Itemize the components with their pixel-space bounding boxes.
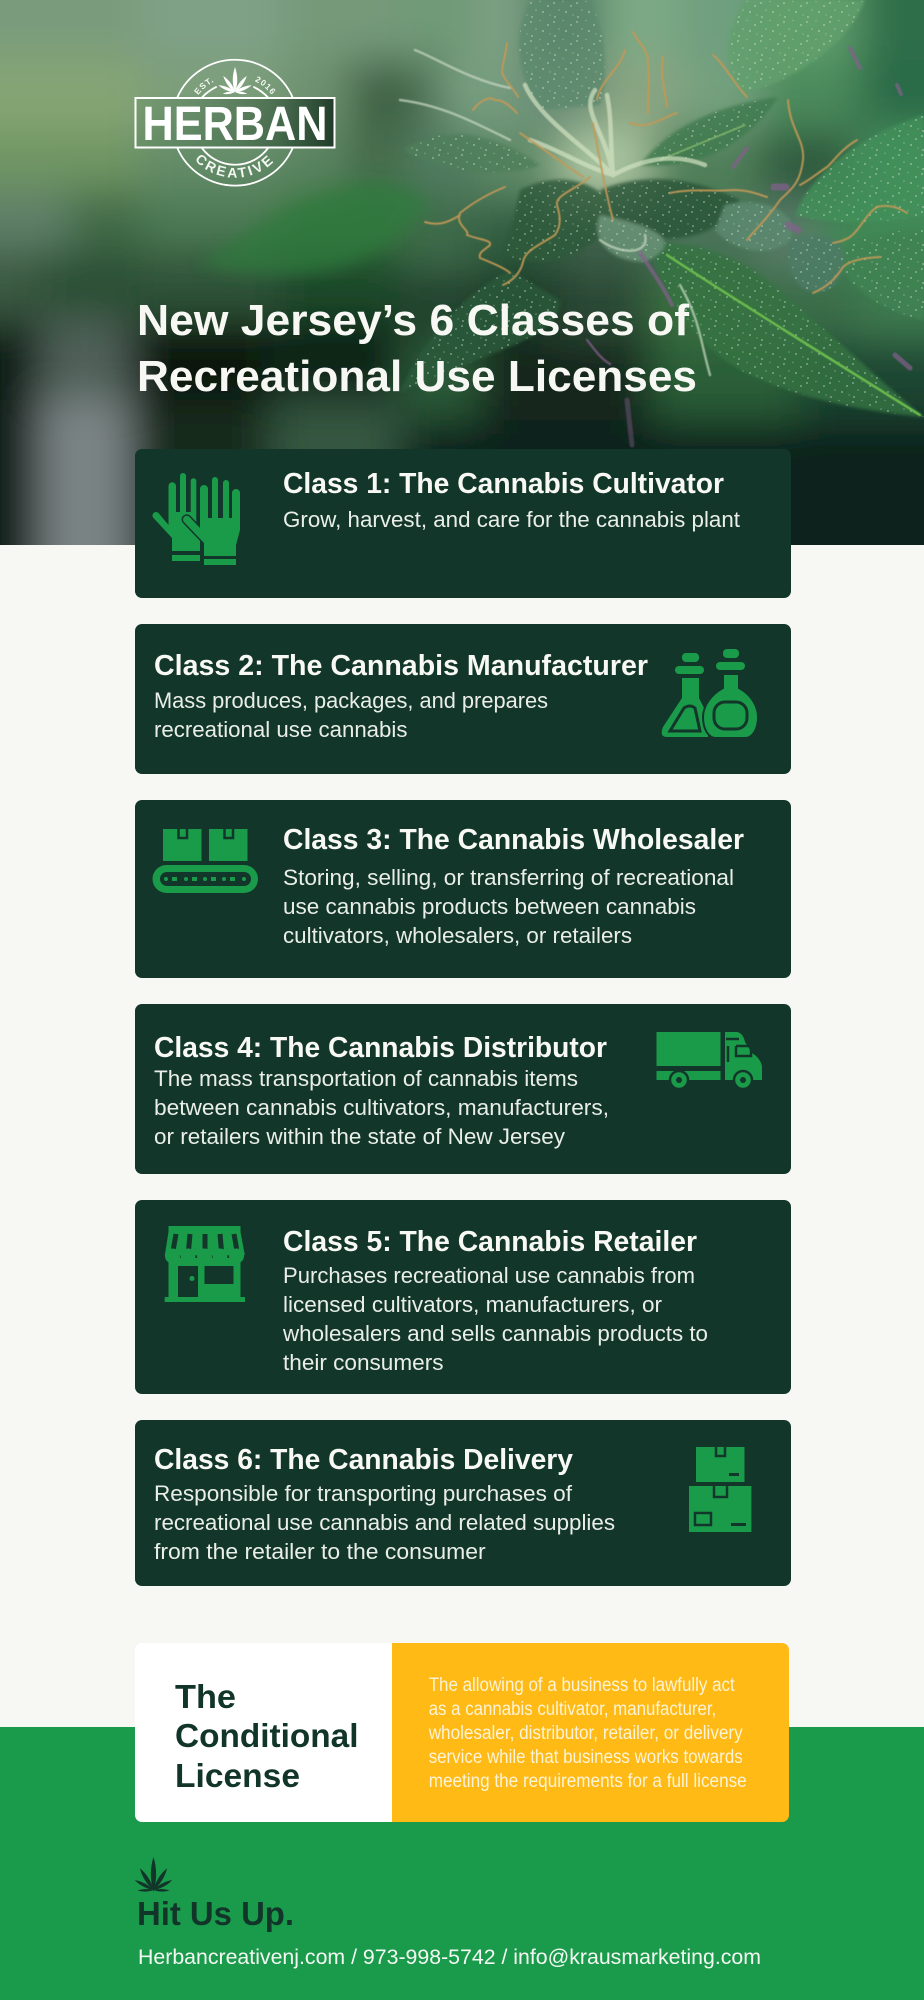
class 4 description: The mass transportation of cannabis items: [154, 1066, 578, 1091]
panel: class 1 cultivator: [135, 449, 791, 598]
class 5 description: Purchases recreational use cannabis from: [283, 1263, 695, 1288]
title: [137, 296, 697, 401]
icon: conveyor belt with boxes: [152, 829, 258, 893]
class 1 heading: Class 1: The Cannabis Cultivator: [283, 468, 724, 500]
class 2 description: [154, 688, 548, 742]
logo: Herban Creative: [134, 58, 336, 186]
icon: gloves: [152, 473, 240, 565]
class 5 description: licensed cultivators, manufacturers, or: [283, 1292, 662, 1317]
class 6 description: Responsible for transporting purchases of: [154, 1481, 573, 1506]
class 6 description: from the retailer to the consumer: [154, 1539, 486, 1564]
title: Recreational Use Licenses: [137, 352, 697, 401]
class 5 description: their consumers: [283, 1350, 444, 1375]
class 3 description: [283, 865, 734, 948]
hero photo of cannabis flower: [0, 0, 924, 545]
conditional license heading: [175, 1678, 358, 1794]
class 3 description: cultivators, wholesalers, or retailers: [283, 923, 632, 948]
conditional license definition: The allowing of a business to lawfully act: [429, 1675, 735, 1696]
footer green band: [0, 1727, 924, 2000]
class 6 description: recreational use cannabis and related supplies: [154, 1510, 615, 1535]
logo: Herban Creative: HERBAN: [142, 98, 328, 151]
conditional license heading: The: [175, 1678, 236, 1715]
soft blurred foreground leaf: [200, 184, 430, 275]
class 6 description: [154, 1481, 615, 1564]
logo: Herban Creative: EST.: [194, 78, 214, 95]
class 4 description: or retailers within the state of New Jersey: [154, 1124, 565, 1149]
panel: class 2 manufacturer: [135, 624, 791, 774]
class 2 description: recreational use cannabis: [154, 717, 408, 742]
conditional license heading: Conditional: [175, 1717, 358, 1754]
class 2 heading: Class 2: The Cannabis Manufacturer: [154, 650, 648, 682]
icon: storefront: [165, 1226, 245, 1302]
class 5 heading: Class 5: The Cannabis Retailer: [283, 1226, 697, 1258]
class 5 description: wholesalers and sells cannabis products to: [282, 1321, 708, 1346]
class 3 heading: Class 3: The Cannabis Wholesaler: [283, 824, 744, 856]
icon: delivery truck: [656, 1032, 762, 1089]
icon: flasks: [662, 649, 758, 738]
conditional license definition: wholesaler, distributor, retailer, or delivery: [428, 1723, 743, 1744]
panel: class 6 delivery: [135, 1420, 791, 1586]
hit us up heading: Hit Us Up.: [137, 1895, 294, 1932]
class 3 description: use cannabis products between cannabis: [283, 894, 696, 919]
panel: class 5 retailer: [135, 1200, 791, 1394]
conditional license definition: [428, 1675, 747, 1792]
class 1 description: Grow, harvest, and care for the cannabis plant: [283, 507, 740, 532]
title: New Jersey’s 6 Classes of: [137, 296, 689, 345]
class 4 description: [154, 1066, 609, 1149]
panel: class 4 distributor: [135, 1004, 791, 1174]
contact details: Herbancreativenj.com / 973-998-5742 / info@krausmarketing.com: [138, 1945, 761, 1969]
icon: stacked boxes: [689, 1447, 751, 1532]
conditional license definition: as a cannabis cultivator, manufacturer,: [429, 1699, 716, 1720]
conditional license definition: meeting the requirements for a full license: [429, 1771, 747, 1792]
class 6 heading: Class 6: The Cannabis Delivery: [154, 1444, 573, 1476]
class 2 description: Mass produces, packages, and prepares: [154, 688, 548, 713]
panel: class 3 wholesaler: [135, 800, 791, 978]
conditional license heading: License: [175, 1757, 300, 1794]
panel: the conditional license: [135, 1643, 789, 1822]
icon: cannabis leaf: [134, 1857, 173, 1892]
class 5 description: [282, 1263, 708, 1375]
conditional license definition: service while that business works towards: [429, 1747, 743, 1768]
class 4 description: between cannabis cultivators, manufacturers,: [154, 1095, 609, 1120]
class 4 heading: Class 4: The Cannabis Distributor: [154, 1032, 607, 1064]
logo: Herban Creative: CREATIVE: [196, 155, 274, 178]
logo: Herban Creative: 2016: [254, 76, 276, 94]
class 3 description: Storing, selling, or transferring of recreational: [283, 865, 734, 890]
